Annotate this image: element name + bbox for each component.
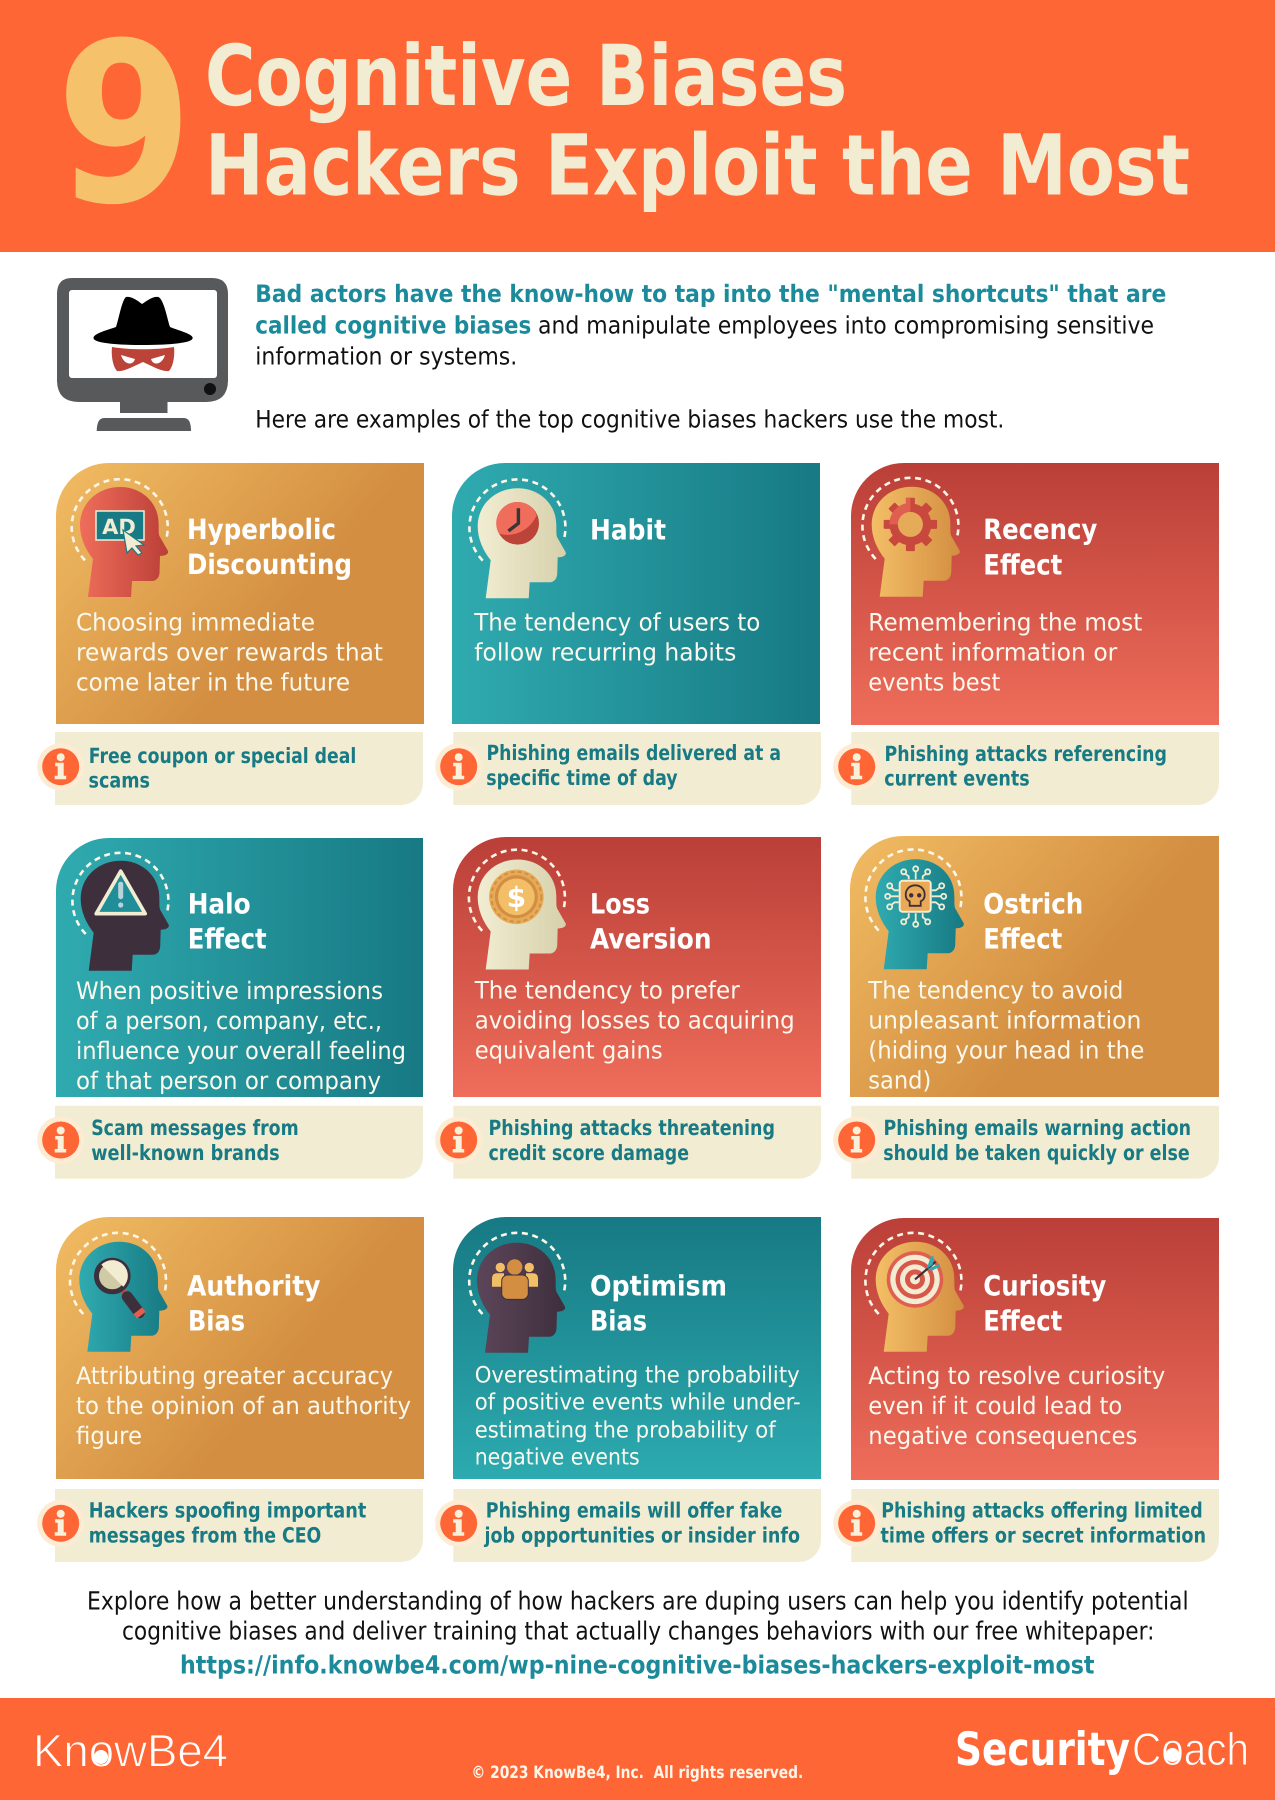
callout: Habit example [435,732,821,805]
callout: Recency example: Phishing attacks referencing [884,742,1167,766]
description: recent information or [868,639,1117,667]
panel: Recency Effect [851,463,1219,725]
logo: SecurityCoach: Coach [1132,1723,1249,1775]
icon: head with warning triangle [72,853,169,971]
intro text: Bad actors have the know-how to tap into the "mental shortcuts" that are [255,280,1166,308]
description: sand) [868,1067,931,1095]
icon: head with ad and cursor [72,479,168,597]
panel: Authority Bias [56,1217,424,1479]
callout: Ostrich example: should be taken quickly or else [883,1141,1190,1165]
description: estimating the probability of [475,1417,777,1443]
callout: Ostrich example: Phishing emails warning action [884,1116,1191,1140]
description: rewards over rewards that [76,639,383,667]
big number 9: 9 [56,0,193,254]
description: negative consequences [868,1422,1137,1450]
description: The tendency of users to [473,609,760,637]
description [868,609,1142,697]
heading [983,513,1097,581]
description: events best [868,669,1000,697]
description [473,609,760,667]
callout: Curiosity example: Phishing attacks offering limited [881,1499,1203,1523]
description: Overestimating the probability [475,1362,800,1388]
icon: head with ad and cursor: AD [102,515,136,539]
intro text: called cognitive biases [255,311,531,339]
description: unpleasant information [868,1007,1141,1035]
description: (hiding your head in the [868,1037,1144,1065]
title [205,27,1190,215]
heading: Effect [188,923,267,956]
footer banner [0,1698,1275,1800]
callout: Hyperbolic example: scams [88,769,150,793]
heading: Curiosity [983,1270,1106,1303]
callout: Curiosity example: time offers or secret information [880,1524,1206,1548]
callout: Optimism example: job opportunities or insider info [484,1524,800,1548]
heading: Optimism [590,1270,727,1303]
description: influence your overall feeling [76,1037,406,1065]
description: Remembering the most [868,609,1142,637]
heading [983,887,1083,956]
panel: Optimism Bias [453,1217,821,1479]
heading: Effect [983,1304,1062,1337]
heading [983,1270,1106,1337]
heading: Recency [983,513,1097,546]
heading: Ostrich [983,887,1083,920]
icon: head with coin: $ [507,881,526,914]
intro text: Here are examples of the top cognitive biases hackers use the most. [255,405,1004,433]
heading [188,887,267,956]
description: even if it could lead to [868,1392,1122,1420]
callout: Optimism example [435,1489,821,1562]
title: Cognitive Biases [205,27,847,125]
intro text [255,280,1166,433]
callout: Recency example: current events [884,767,1030,791]
callout: Loss Aversion example: credit score damage [488,1141,689,1165]
callout: Halo example: well-known brands [91,1141,280,1165]
icon: head with chip and skull [865,849,964,969]
description [76,1362,411,1450]
heading: Halo [188,887,251,920]
icon: head with coin [469,850,566,970]
panel: Curiosity Effect [851,1218,1219,1480]
callout: Loss Aversion example: Phishing attacks threatening [488,1116,775,1140]
panel: Ostrich Effect [850,836,1219,1097]
logo: KnowBe4: KnowBe4 [33,1725,228,1777]
description [76,609,383,697]
callout: Loss Aversion example [435,1106,821,1179]
intro text: and manipulate employees into compromising sensitive [538,311,1154,339]
callout: Hyperbolic example [37,732,423,805]
closing text [87,1586,1189,1679]
callout: Optimism example: Phishing emails will offer fake [486,1499,782,1523]
heading: Bias [188,1304,245,1337]
callout: Authority example [37,1489,423,1562]
description: Acting to resolve curiosity [868,1362,1165,1390]
description: Choosing immediate [76,609,315,637]
heading [187,1270,320,1337]
closing text: https://info.knowbe4.com/wp-nine-cognitive-biases-hackers-exploit-most [180,1650,1095,1679]
description: of positive events while under- [475,1390,801,1416]
description [475,1362,801,1471]
logo: SecurityCoach: Security [955,1722,1130,1776]
icon: hacker monitor [57,278,228,431]
callout: Halo example: Scam messages from [91,1116,299,1140]
icon: head with target [865,1233,964,1352]
callout: Curiosity example [833,1489,1219,1562]
description: negative events [475,1445,640,1471]
description: figure [76,1422,142,1450]
description: of a person, company, etc., [76,1007,382,1035]
header banner [0,0,1275,252]
description: Attributing greater accuracy [76,1362,393,1390]
callout: Authority example: messages from the CEO [89,1524,321,1548]
icon: head with magnifier [70,1233,167,1352]
description: come later in the future [76,669,350,697]
description [76,977,406,1095]
description: to the opinion of an authority [76,1392,411,1420]
heading: Loss [590,887,650,920]
icon: head with gear [862,478,960,597]
heading: Aversion [590,923,712,956]
callout: Authority example: Hackers spoofing important [89,1499,366,1523]
callout: Recency example [833,732,1219,805]
callout: Habit example: Phishing emails delivered at a [486,741,781,765]
heading: Bias [590,1304,647,1337]
description: The tendency to prefer [474,977,740,1005]
description [868,1362,1165,1450]
description: of that person or company [76,1067,381,1095]
callout: Hyperbolic example: Free coupon or special deal [89,744,356,768]
panel: Halo Effect [56,838,423,1097]
description [474,977,795,1065]
heading [590,887,712,956]
intro text: information or systems. [255,343,517,371]
description [867,977,1144,1095]
description: The tendency to avoid [867,977,1123,1005]
description: When positive impressions [76,977,383,1005]
description: equivalent gains [475,1037,663,1065]
icon: head with clock [469,479,566,598]
callout: Habit example: specific time of day [486,766,678,790]
panel: Hyperbolic Discounting [56,463,424,724]
panel: Loss Aversion [453,837,821,1097]
description: follow recurring habits [474,639,736,667]
heading [187,513,352,581]
heading: Habit [590,513,666,546]
callout: Halo example [37,1106,423,1179]
copyright: © 2023 KnowBe4, Inc. All rights reserved. [472,1763,803,1783]
icon: head with people [469,1233,565,1353]
description: avoiding losses to acquiring [475,1007,795,1035]
heading [590,1270,727,1337]
heading: Authority [187,1270,320,1303]
panel: Habit [452,463,820,724]
heading: Hyperbolic [187,513,336,546]
callout: Ostrich example [833,1106,1219,1179]
heading: Effect [983,923,1062,956]
heading: Discounting [187,548,352,581]
heading: Effect [983,548,1062,581]
